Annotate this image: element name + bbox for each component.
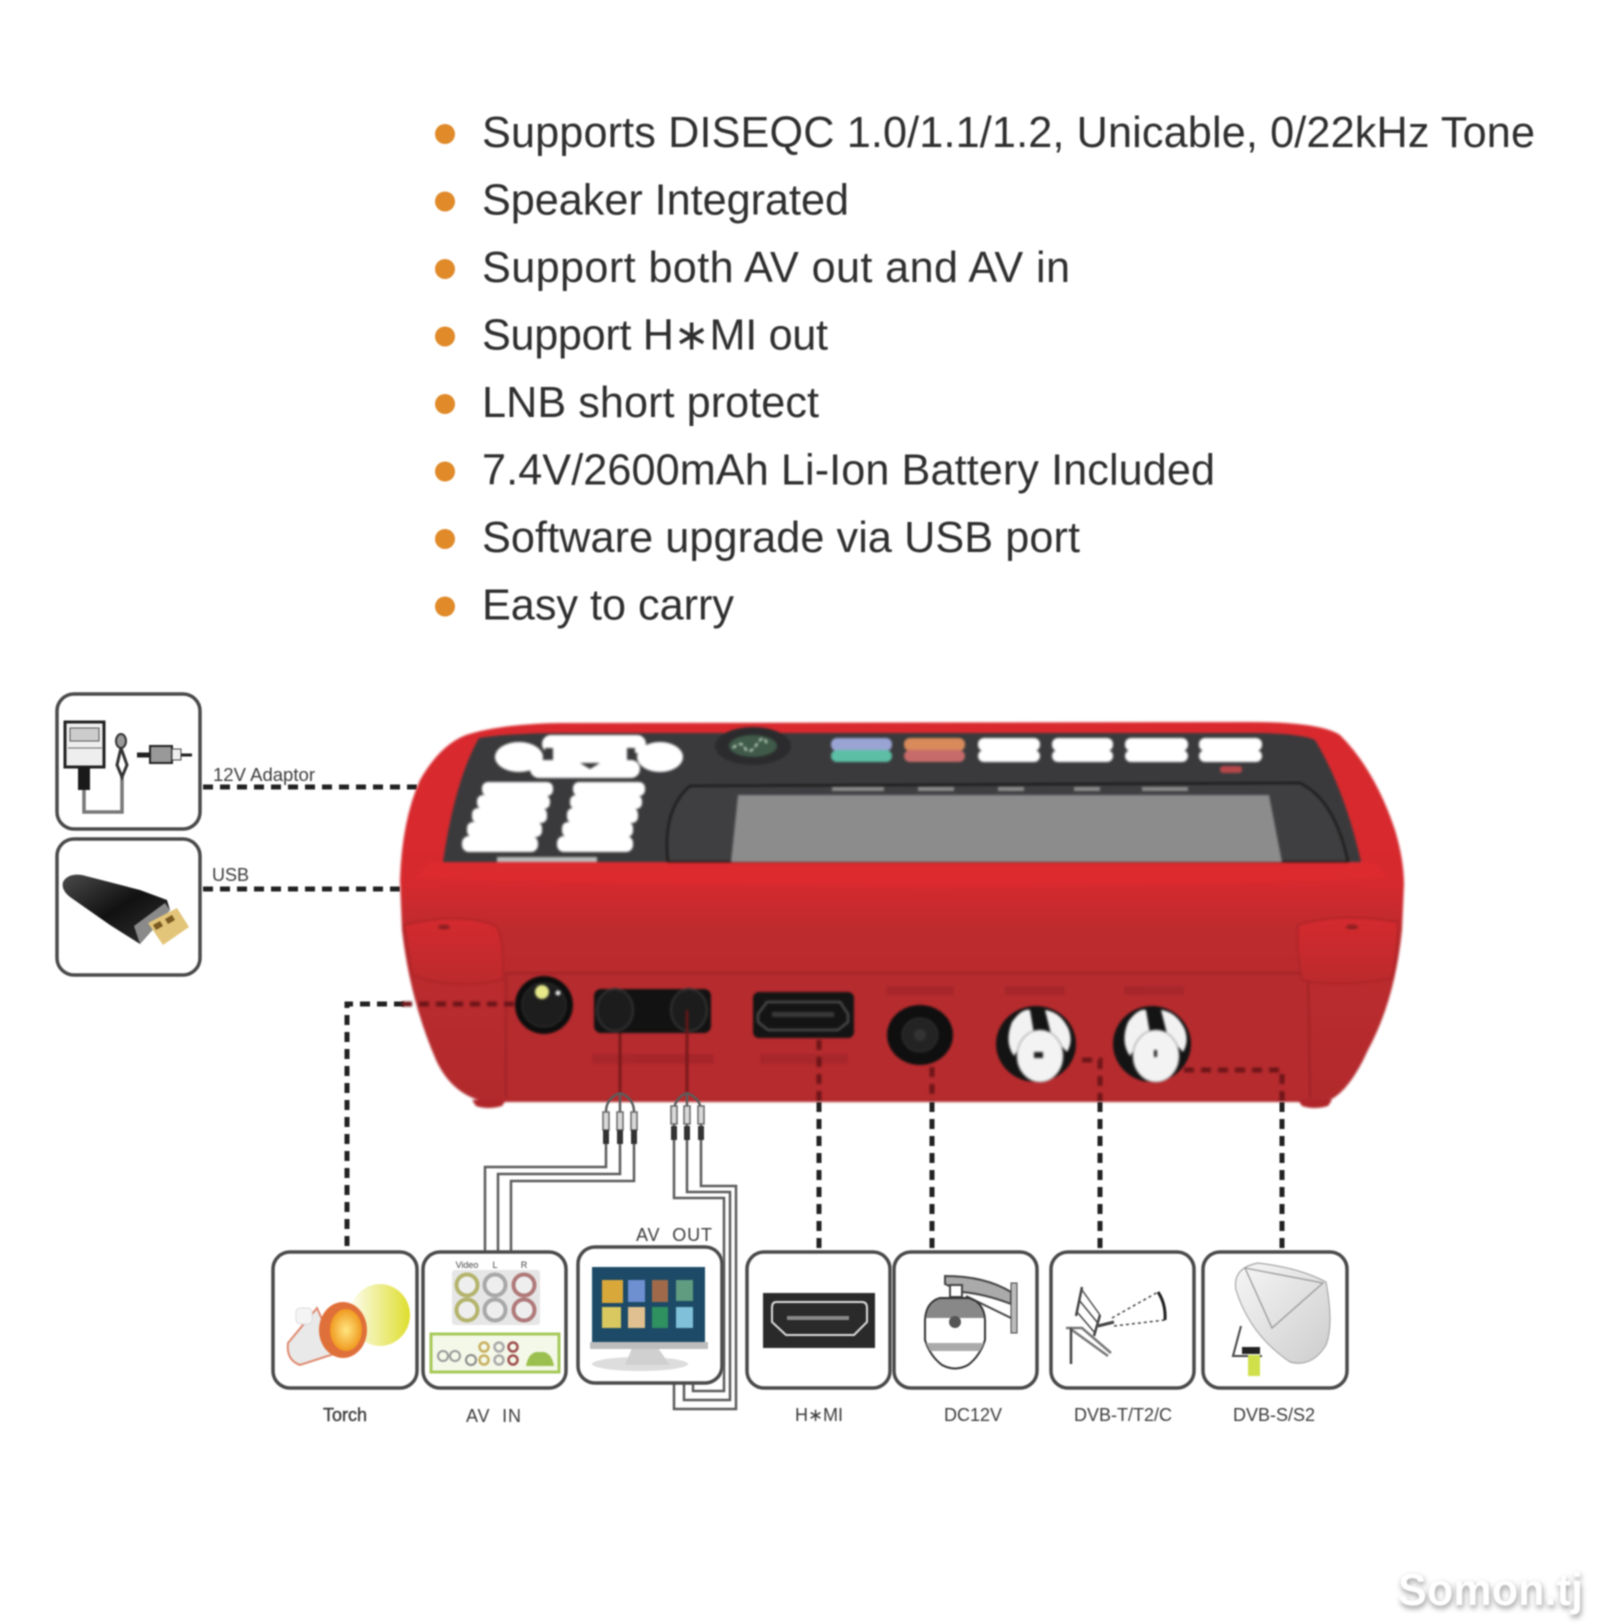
icon: TV [590,1267,708,1371]
function buttons [831,738,1262,773]
label: DVB-S/S2: DVB-S/S2 [1233,1405,1315,1425]
panel: DVB-T/T2/C [1051,1252,1194,1388]
label: HMI: H∗MI [795,1405,843,1425]
panel: HDMI [747,1252,890,1388]
port: DC 12V [887,1005,953,1065]
icon: satellite dish [1233,1263,1330,1376]
device body [400,722,1404,1102]
label: DC12V: DC12V [944,1405,1002,1425]
icon: RCA jacks: Video [456,1260,478,1270]
icon: USB stick [63,875,189,945]
watermark: Somon.tj [1398,1564,1583,1615]
icon: dome camera [925,1276,1017,1368]
panel: AV out [578,1247,722,1383]
feature: speaker: Speaker Integrated [482,176,849,224]
left bracket [404,918,503,984]
port recess [506,973,1310,1098]
icon: RCA jacks: R [521,1260,528,1270]
icon: RCA jacks: L [492,1260,498,1270]
port: torch LED [515,976,573,1034]
feature: DiSEqC support: Supports DISEQC 1.0/1.1/1.2, Unicable, 0/22kHz Tone [482,109,1535,157]
icon: RCA jacks [431,1260,559,1372]
number keys [462,782,645,852]
icon: power adaptor [65,722,192,812]
screen [731,795,1282,862]
port: F connector input 1 [996,1006,1076,1082]
AV in plugs and wires [485,1093,637,1252]
port: HDMI [753,992,854,1038]
label: AV OUT: AV OUT [636,1225,712,1245]
port: F connector input 2 [1113,1006,1191,1082]
panel: AV in [423,1252,566,1388]
feature: AV in and out: Support both AV out and AV in [482,244,1070,292]
icon: torch [288,1284,410,1365]
panel: USB stick [57,839,200,975]
compass dial [715,727,791,765]
label: Torch: Torch [323,1405,367,1425]
port silk labels [592,986,1184,1064]
icon: aerial antenna [1066,1287,1165,1364]
connection lines outside device [203,787,1282,1252]
feet [472,1100,1332,1108]
feature: HDMI out: Support H∗MI out [482,312,828,360]
port: AV in and AV out [594,989,711,1033]
screen bezel [667,783,1348,862]
feature list [435,109,1535,630]
feature: battery: 7.4V/2600mAh Li-Ion Battery Included [482,446,1215,494]
screen tab marks [497,787,1188,862]
label: DVB-T/T2/C: DVB-T/T2/C [1074,1405,1172,1425]
panel: DC12V [894,1252,1037,1388]
AV out plugs and wires [671,1093,736,1409]
d-pad [495,735,683,778]
device: red rugged meter [400,722,1404,1108]
connection lines over device [402,1002,514,1006]
right bracket [1298,918,1398,984]
d-pad marks [545,748,635,769]
lip highlight [414,862,1390,887]
icon: HDMI port [763,1293,875,1348]
feature: LNB protection: LNB short protect [482,379,819,427]
panel: 12V adaptor [57,694,200,829]
feature: USB upgrade: Software upgrade via USB port [482,514,1080,562]
panel: DVB-S/S2 [1203,1252,1347,1388]
feature: portable: Easy to carry [482,582,734,630]
label: 12V Adaptor: 12V Adaptor [213,765,315,785]
label: AV IN: AV IN [466,1406,521,1426]
label: USB: USB [212,865,249,885]
control panel [443,733,1361,862]
panel: Torch [273,1252,417,1388]
